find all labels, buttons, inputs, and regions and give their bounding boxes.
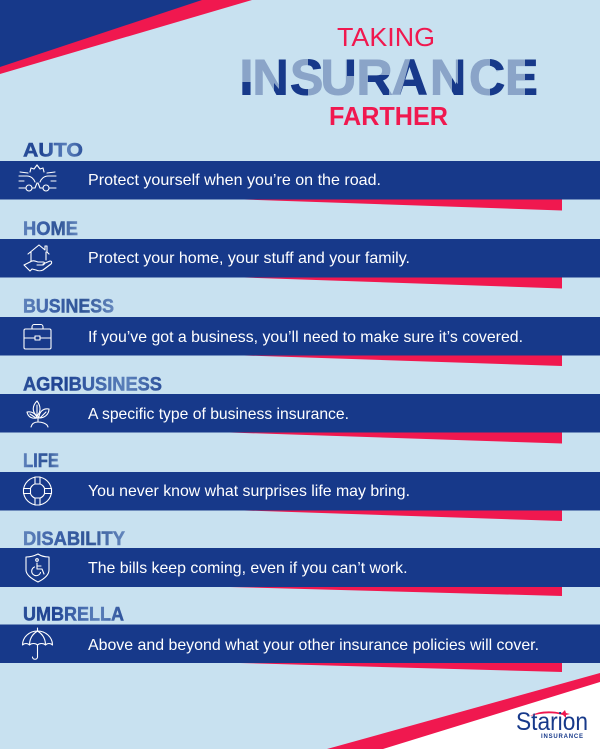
icon: briefcase xyxy=(24,324,51,349)
icon: plant xyxy=(27,401,49,427)
bar: auto xyxy=(0,161,600,210)
heading: disability: DISABILITY xyxy=(23,528,125,550)
text: auto: Protect yourself when you’re on the road. xyxy=(88,172,381,189)
text: home: Protect your home, your stuff and your family. xyxy=(88,250,410,267)
text: umbrella: Above and beyond what your other insurance policies will cover. xyxy=(88,637,539,654)
bottom-right corner accent xyxy=(327,673,600,749)
heading: business: BUSINESS xyxy=(23,296,114,318)
top-left corner accent xyxy=(0,0,252,74)
icon: shield with wheelchair xyxy=(26,554,49,582)
bar: umbrella xyxy=(0,624,600,672)
icon: logo swoosh xyxy=(530,710,570,718)
bar: life xyxy=(0,472,600,521)
text: agribusiness: A specific type of business insurance. xyxy=(88,406,349,423)
text: business: If you’ve got a business, you’ll need to make sure it’s covered. xyxy=(88,329,523,346)
icon: car crash xyxy=(19,165,56,191)
title: TAKING xyxy=(337,22,435,52)
bar: business xyxy=(0,317,600,366)
title: INSURANCE xyxy=(240,50,538,106)
panel: home xyxy=(0,218,600,288)
logo: Starion Insurance: Starion xyxy=(516,708,588,736)
bar: home xyxy=(0,239,600,288)
title: FARTHER xyxy=(329,101,448,131)
text: life: You never know what surprises life may bring. xyxy=(88,483,410,500)
heading: umbrella: UMBRELLA xyxy=(23,604,124,626)
panel: life xyxy=(0,450,600,521)
panel: auto xyxy=(0,140,600,210)
panel: business xyxy=(0,296,600,366)
title xyxy=(240,22,538,131)
icon: house in hand xyxy=(24,245,52,271)
panel: umbrella xyxy=(0,604,600,672)
icon: lifebuoy xyxy=(24,477,52,505)
text: disability: The bills keep coming, even if you can’t work. xyxy=(88,560,408,577)
heading: home: HOME xyxy=(23,218,78,240)
logo: Starion Insurance: INSURANCE xyxy=(541,734,583,740)
heading: auto: AUTO xyxy=(23,140,83,162)
heading: agribusiness: AGRIBUSINESS xyxy=(23,374,162,396)
bar: agribusiness xyxy=(0,394,600,444)
panel: agribusiness xyxy=(0,374,600,444)
panel: disability xyxy=(0,528,600,596)
heading: life: LIFE xyxy=(23,450,59,472)
icon: umbrella xyxy=(22,628,52,659)
bar: disability xyxy=(0,548,600,596)
